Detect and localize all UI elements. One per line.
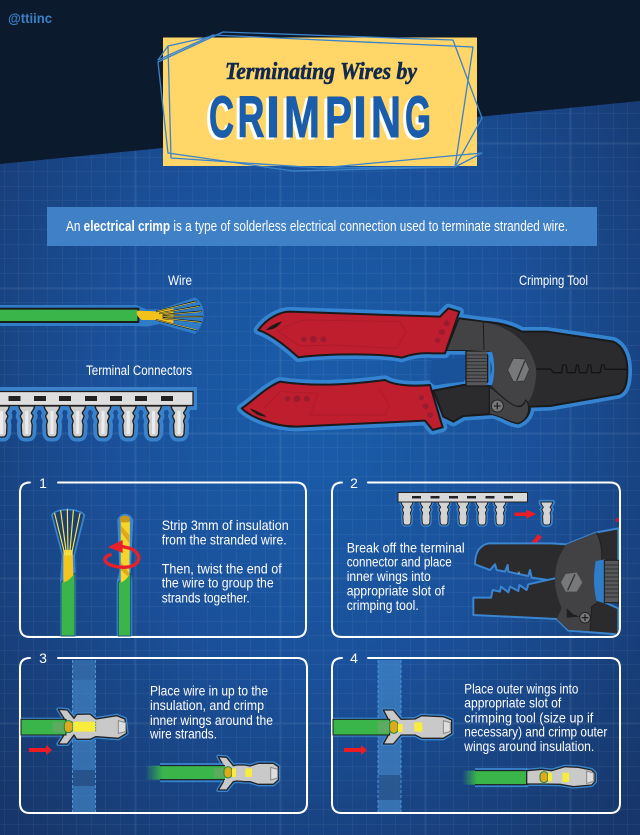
illustration: crimped inner wings (145, 757, 278, 790)
title banner (158, 32, 482, 171)
title line: CRIMPING: N (371, 85, 401, 150)
small screw (580, 612, 590, 623)
panel: step 2 (332, 475, 620, 637)
step text (463, 680, 608, 754)
step frame (332, 482, 620, 637)
arrow: right (515, 510, 535, 518)
step text: the wire to group the (162, 575, 274, 591)
step text: Then, twist the end of (162, 560, 282, 576)
tool halo (242, 308, 627, 430)
title line: CRIMPING: I (266, 85, 280, 150)
title line: CRIMPING: R (234, 87, 262, 152)
step text (347, 539, 465, 613)
title line: CRIMPING: M (281, 87, 317, 152)
dark claw notch (567, 608, 580, 618)
title line: CRIMPING: M (284, 85, 320, 150)
red handles (242, 308, 459, 430)
label: Terminal Connectors: Terminal Connectors (86, 363, 192, 378)
illustration: wire entering connector (21, 709, 127, 744)
illustration: single connector (541, 502, 553, 525)
illustration: stripped and twisted wires (51, 509, 139, 636)
handle gap (430, 357, 464, 385)
title line: CRIMPING: R (238, 85, 264, 150)
step text: Place wire in up to the (150, 683, 268, 699)
step text: crimping tool. (347, 597, 419, 613)
step number: 1 (39, 475, 47, 491)
step text: appropriate slot of (464, 695, 561, 711)
title line: CRIMPING: G (405, 85, 431, 150)
step text: inner wings around the (150, 712, 273, 728)
step text: insulation, and crimp (150, 697, 264, 713)
illustration: terminal connector strip (0, 387, 197, 437)
step number: 2 (350, 475, 358, 491)
illustration: crimping zone band (378, 660, 401, 812)
step text: wire strands. (149, 725, 217, 741)
arrow: wire direction (29, 745, 52, 755)
label: Wire: Wire (168, 273, 192, 288)
handle details (263, 320, 406, 415)
title line: Terminating Wires by: Terminating Wires by (225, 59, 417, 85)
step text: strands together. (162, 589, 250, 605)
pivot bolt (508, 358, 529, 382)
step text (162, 517, 289, 605)
title line: CRIMPING: P (322, 87, 349, 152)
tool body (555, 532, 602, 631)
title line: CRIMPING: I (353, 85, 367, 150)
intro banner (47, 207, 597, 246)
pivot bolt (561, 573, 582, 592)
step number: 3 (39, 650, 47, 666)
illustration: outer wings in tool slot (333, 710, 452, 744)
illustration: open crimping tool (473, 518, 619, 634)
arrow: wire direction (344, 745, 367, 755)
step text: crimping tool (size up if (464, 709, 593, 725)
step text (149, 683, 273, 741)
title line: CRIMPING: C (206, 87, 231, 152)
lower jaw (473, 578, 618, 634)
lighter lower claw (489, 387, 529, 423)
illustration: stripped wire (0, 297, 204, 334)
title line: CRIMPING (206, 85, 431, 152)
small screw (491, 400, 503, 412)
step text: Strip 3mm of insulation (162, 517, 289, 533)
title line: CRIMPING: N (368, 87, 398, 152)
spring (594, 559, 619, 603)
step number: 4 (350, 650, 358, 666)
spring (466, 351, 488, 386)
illustration: connector strip (398, 492, 528, 525)
title line: CRIMPING: I (350, 87, 364, 152)
illustration: crimping tool (242, 308, 627, 430)
title line: CRIMPING: P (325, 85, 352, 150)
step text: Place outer wings into (464, 680, 578, 696)
panel: step 4 (332, 650, 620, 813)
step text: Break off the terminal (347, 539, 465, 555)
step frame (332, 658, 620, 813)
title line: CRIMPING: C (209, 85, 234, 150)
illustration: crimped outer wings (462, 767, 595, 787)
decorative title frame (158, 32, 482, 171)
title line: CRIMPING: G (402, 87, 428, 152)
step frame (20, 658, 307, 813)
illustration: open crimping tool: v (518, 570, 521, 575)
arrow: down-left (526, 535, 541, 551)
illustration: crimping zone band (72, 660, 96, 812)
panel: step 3 (20, 650, 307, 813)
step text: necessary) and crimp outer (464, 724, 608, 740)
upper jaw (475, 528, 618, 582)
title line: CRIMPING: I (263, 87, 277, 152)
step frame (20, 482, 306, 637)
step text: inner wings into (347, 568, 431, 584)
step text: connector and place (347, 554, 452, 570)
spring slot (486, 352, 494, 385)
step text: wings around insulation. (463, 738, 594, 754)
step text: from the stranded wire. (162, 531, 287, 547)
jaws (433, 318, 627, 423)
jaw teeth seam (536, 365, 627, 373)
handle: @ttiinc: @ttiinc (8, 10, 52, 26)
label: Crimping Tool: Crimping Tool (519, 273, 588, 288)
splayed wire (51, 509, 85, 636)
icon: red twist arrow (105, 540, 139, 567)
panel: step 1 (20, 475, 306, 637)
step text: appropriate slot of (347, 583, 445, 599)
lighter upper body (447, 319, 536, 406)
twisted wire (117, 514, 133, 636)
